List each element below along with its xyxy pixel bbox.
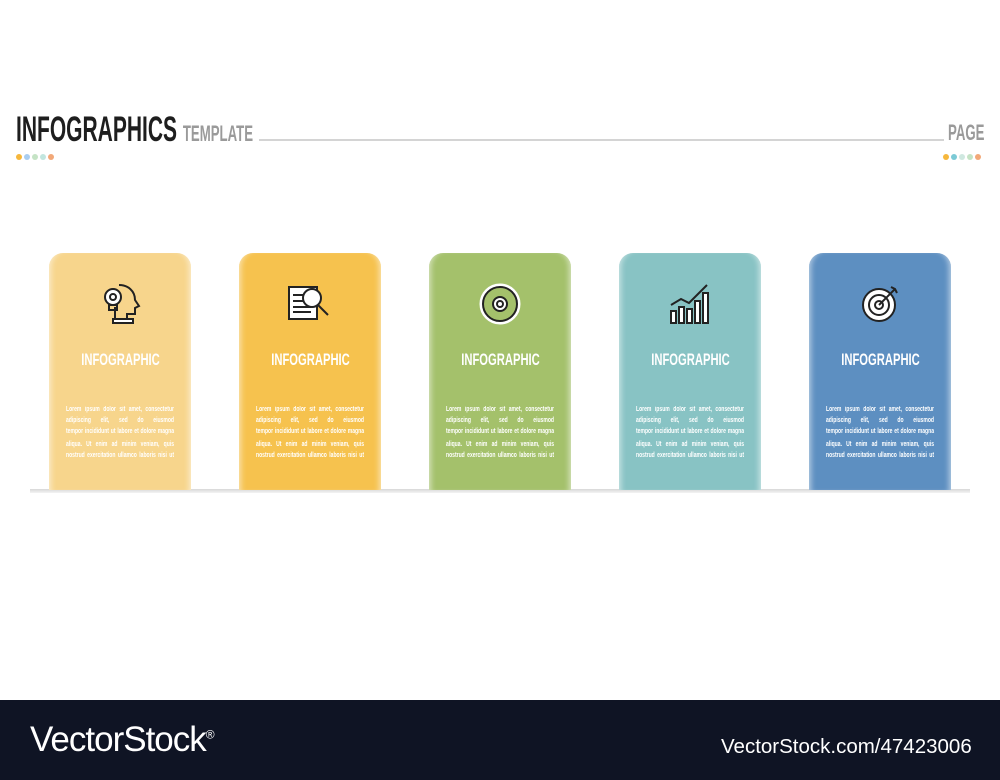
footer bar <box>0 700 1000 780</box>
dots right <box>943 154 981 160</box>
panel: card 3 <box>429 253 571 490</box>
panel: card 3: adipiscing elit, sed do eiusmod <box>446 417 554 424</box>
panel: card 5: aliqua. Ut enim ad minim veniam, quis <box>826 441 934 448</box>
dots left <box>16 154 54 160</box>
icon: target <box>862 286 898 322</box>
footer id: VectorStock.com/47423006 <box>721 735 972 758</box>
panel: card 4: nostrud exercitation ullamco laboris nisi ut <box>636 452 744 459</box>
panel: card 4 <box>619 253 761 490</box>
panel: card 3: nostrud exercitation ullamco laboris nisi ut <box>446 452 554 459</box>
panel: card 1 <box>49 253 191 490</box>
shelf line <box>30 489 970 493</box>
icon: gear cycle <box>480 284 520 324</box>
panel: card 5: adipiscing elit, sed do eiusmod <box>826 417 934 424</box>
icon: bar chart <box>670 284 709 324</box>
panel: card 3: tempor incididunt ut labore et dolore magna <box>446 428 554 435</box>
panel: card 1: tempor incididunt ut labore et dolore magna <box>66 428 174 435</box>
panel: card 2: nostrud exercitation ullamco laboris nisi ut <box>256 452 364 459</box>
title: INFOGRAPHICS TEMPLATE <box>16 110 253 149</box>
panel: card 1: INFOGRAPHIC <box>81 350 159 369</box>
panel: card 5: tempor incididunt ut labore et dolore magna <box>826 428 934 435</box>
panel: card 2: aliqua. Ut enim ad minim veniam, quis <box>256 441 364 448</box>
panel: card 4: Lorem ipsum dolor sit amet, consectetur <box>636 406 744 413</box>
footer logo: VectorStock® <box>30 720 214 759</box>
panel: card 2: adipiscing elit, sed do eiusmod <box>256 417 364 424</box>
panel: card 4: aliqua. Ut enim ad minim veniam, quis <box>636 441 744 448</box>
panel: card 1: aliqua. Ut enim ad minim veniam, quis <box>66 441 174 448</box>
panel: card 4: adipiscing elit, sed do eiusmod <box>636 417 744 424</box>
panel: card 1: adipiscing elit, sed do eiusmod <box>66 417 174 424</box>
panel: card 1: nostrud exercitation ullamco laboris nisi ut <box>66 452 174 459</box>
panel: card 5: INFOGRAPHIC <box>841 350 919 369</box>
panel: card 4: INFOGRAPHIC <box>651 350 729 369</box>
panel: card 5 <box>809 253 951 490</box>
panel: card 5: nostrud exercitation ullamco laboris nisi ut <box>826 452 934 459</box>
page label: PAGE <box>948 120 984 145</box>
panel: card 3: Lorem ipsum dolor sit amet, consectetur <box>446 406 554 413</box>
panel: card 2: INFOGRAPHIC <box>271 350 349 369</box>
panel: card 2: Lorem ipsum dolor sit amet, consectetur <box>256 406 364 413</box>
panel: card 5: Lorem ipsum dolor sit amet, consectetur <box>826 406 934 413</box>
panel: card 1: Lorem ipsum dolor sit amet, consectetur <box>66 406 174 413</box>
panel: card 2 <box>239 253 381 490</box>
icon: head with bulb <box>104 284 140 324</box>
panel: card 3: INFOGRAPHIC <box>461 350 539 369</box>
icon: document magnifier <box>288 286 329 320</box>
panel: card 4: tempor incididunt ut labore et dolore magna <box>636 428 744 435</box>
header line <box>259 139 944 141</box>
panel: card 2: tempor incididunt ut labore et dolore magna <box>256 428 364 435</box>
panel: card 3: aliqua. Ut enim ad minim veniam, quis <box>446 441 554 448</box>
